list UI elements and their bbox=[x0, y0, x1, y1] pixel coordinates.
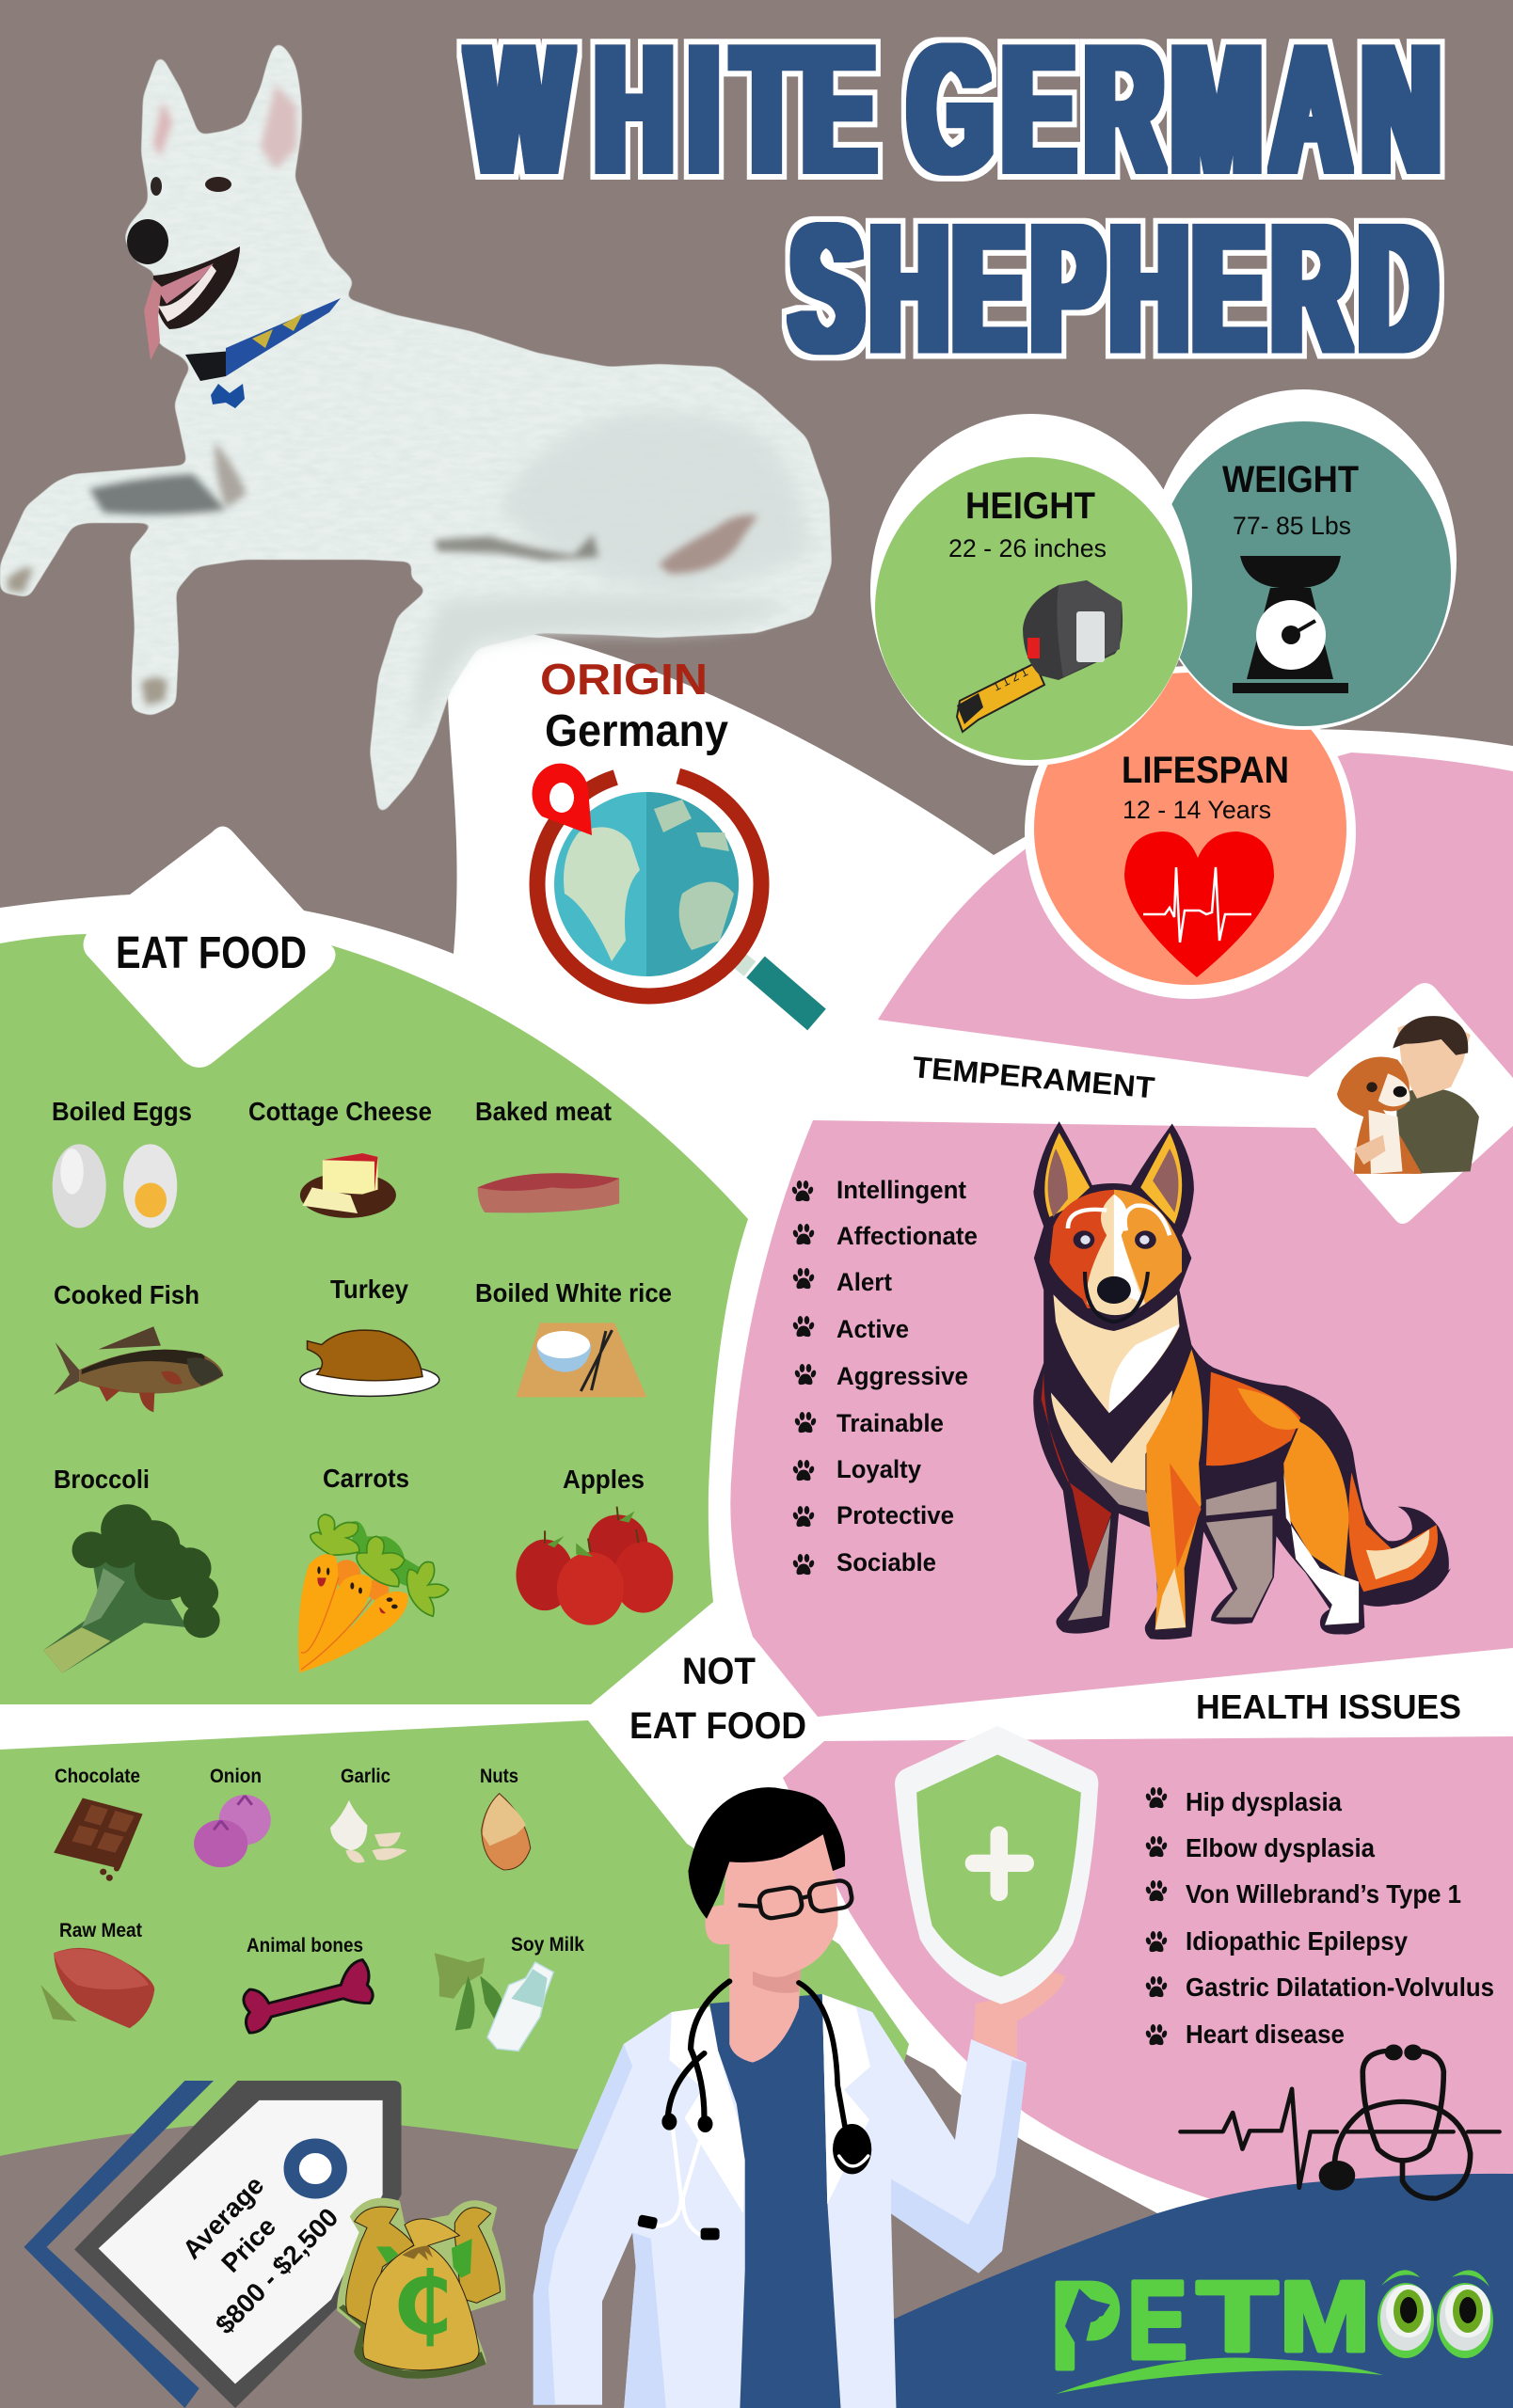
belly bbox=[659, 515, 757, 574]
not eat food heading: EAT FOOD bbox=[629, 1705, 806, 1747]
icon: fish bbox=[54, 1326, 223, 1412]
icon: chocolate bbox=[54, 1798, 143, 1881]
white stethoscope tubing bbox=[656, 2129, 701, 2236]
coat shade bbox=[534, 2044, 666, 2408]
bullet: Heart disease: Heart disease bbox=[1186, 2020, 1345, 2049]
arm bbox=[973, 1972, 1065, 2058]
not eat food icons bbox=[40, 1794, 553, 2051]
icon: baked meat bbox=[478, 1173, 619, 1212]
tag outline bbox=[74, 2081, 402, 2408]
stat: lifespan bbox=[1025, 666, 1356, 999]
logo: petmoo bbox=[1050, 2257, 1493, 2395]
stat: weight bbox=[1150, 389, 1457, 730]
front leg bbox=[1146, 1349, 1202, 1630]
not eat food labels: Garlic bbox=[341, 1766, 390, 1787]
icon: nut bbox=[482, 1794, 531, 1870]
icon: turkey bbox=[300, 1330, 439, 1396]
not eat food labels bbox=[55, 1766, 584, 1956]
bullet: Affectionate: Affectionate bbox=[836, 1222, 978, 1250]
bullet: Active: Active bbox=[836, 1315, 909, 1343]
illustration: orange dog bbox=[1033, 1121, 1451, 1640]
price text bbox=[177, 2170, 343, 2339]
icon: eggs bbox=[53, 1144, 177, 1228]
not eat food labels: Raw Meat bbox=[59, 1920, 142, 1941]
origin bbox=[512, 655, 817, 1022]
panel: health issues backdrop bbox=[783, 1736, 1513, 2199]
icon: cheese bbox=[300, 1153, 396, 1218]
white german shepherd photo bbox=[3, 45, 829, 811]
height value: 22 - 26 inches bbox=[948, 534, 1107, 562]
price text: Price bbox=[215, 2211, 281, 2278]
price tag bbox=[24, 2081, 402, 2408]
face bbox=[1049, 1190, 1114, 1308]
hind legs bbox=[1283, 1472, 1359, 1625]
icon: onion bbox=[194, 1795, 271, 1867]
icon: carrots bbox=[298, 1514, 449, 1672]
tail shading bbox=[414, 594, 790, 743]
under hip shadow bbox=[435, 534, 598, 561]
weight value: 77- 85 Lbs bbox=[1233, 512, 1351, 540]
health issues list bbox=[1145, 1787, 1494, 2049]
ears bbox=[1044, 1133, 1182, 1224]
neck bbox=[729, 1940, 802, 2063]
bullet: Loyalty bbox=[792, 1455, 921, 1483]
panel: eat food backdrop bbox=[0, 934, 748, 1704]
logo wordmark: E bbox=[1127, 2258, 1187, 2383]
panel: not eat food backdrop bbox=[0, 1720, 909, 2156]
cottage cheese label: Cottage Cheese bbox=[248, 1097, 432, 1126]
tag back chevron bbox=[24, 2081, 214, 2408]
not eat food labels: Onion bbox=[210, 1766, 262, 1787]
blue corner wave bbox=[847, 2174, 1513, 2408]
rice label: Boiled White rice bbox=[475, 1278, 672, 1307]
icon: scale bbox=[1233, 556, 1348, 693]
bullet: Loyalty: Loyalty bbox=[836, 1455, 921, 1483]
logo swoosh bbox=[1056, 2357, 1383, 2394]
shirt bbox=[709, 1994, 841, 2408]
chest bbox=[1053, 1294, 1179, 1413]
eat food heading: EAT FOOD bbox=[116, 928, 307, 978]
price text: $800 - $2,500 bbox=[210, 2202, 343, 2339]
illustration: doctor bbox=[534, 1787, 1065, 2408]
not eat food labels: Soy Milk bbox=[511, 1934, 584, 1956]
logo dog silhouette bbox=[1065, 2289, 1110, 2342]
doctor head and stethoscope bbox=[662, 1787, 1065, 2174]
bullet: Von Willebrand's: Von Willebrand’s Type 1 bbox=[1186, 1879, 1461, 1909]
bullet: Sociable bbox=[792, 1548, 936, 1576]
bullet: Elbow dysplasia: Elbow dysplasia bbox=[1186, 1833, 1376, 1862]
cooked fish label: Cooked Fish bbox=[54, 1280, 199, 1309]
title: WHITE GERMAN bbox=[469, 10, 1440, 210]
bullet: Trainable: Trainable bbox=[836, 1409, 944, 1437]
logo wordmark: P bbox=[1050, 2257, 1122, 2395]
panel: pink lifespan backdrop bbox=[878, 752, 1513, 1078]
icon: tape measure: 1 1 2 1 bbox=[991, 664, 1030, 694]
right lapel bbox=[822, 1994, 870, 2204]
icon: apples bbox=[516, 1507, 673, 1625]
height label: HEIGHT bbox=[965, 485, 1095, 527]
icon: shield bbox=[895, 1726, 1098, 2004]
carrots label: Carrots bbox=[323, 1464, 409, 1493]
temperament list bbox=[791, 1176, 978, 1576]
icon: money bags bbox=[337, 2198, 505, 2379]
bullet: Aggressive: Aggressive bbox=[836, 1362, 968, 1390]
lifespan label: LIFESPAN bbox=[1122, 750, 1289, 791]
not eat food labels: Animal bones bbox=[247, 1935, 363, 1956]
bullet: Hip dysplasia: Hip dysplasia bbox=[1186, 1787, 1343, 1816]
hip shading bbox=[499, 412, 809, 593]
bullet: Intellingent: Intellingent bbox=[836, 1176, 966, 1204]
torso bbox=[1206, 1372, 1300, 1465]
apples label: Apples bbox=[563, 1465, 645, 1494]
tag body bbox=[99, 2100, 383, 2384]
not eat food labels: Nuts bbox=[480, 1766, 518, 1787]
boiled eggs label: Boiled Eggs bbox=[52, 1097, 192, 1126]
shaded upper foreleg bbox=[89, 474, 226, 515]
doctor coat and shirt bbox=[534, 1994, 1027, 2408]
health issues heading: HEALTH ISSUES bbox=[1196, 1687, 1461, 1726]
logo wordmark: T bbox=[1197, 2261, 1278, 2372]
bullet: Idiopathic Epilepsy: Idiopathic Epilepsy bbox=[1186, 1926, 1409, 1956]
head bbox=[705, 1819, 838, 1976]
right sleeve shade bbox=[891, 2060, 1027, 2273]
left lapel bbox=[669, 2006, 745, 2213]
food icons bbox=[43, 1144, 673, 1673]
coat right bbox=[822, 1994, 1027, 2408]
coat buttons bbox=[637, 2214, 658, 2229]
icon: stethoscope with ekg bbox=[1180, 2047, 1500, 2198]
icon: raw meat bbox=[40, 1948, 154, 2028]
bullet: Alert: Alert bbox=[836, 1268, 892, 1296]
white layout band bbox=[0, 632, 1513, 2213]
temperament heading: TEMPERAMENT bbox=[911, 1050, 1156, 1105]
eyes and nose bbox=[205, 177, 231, 192]
tag hole bbox=[292, 2146, 340, 2192]
hair bbox=[688, 1787, 845, 1919]
weight label: WEIGHT bbox=[1222, 459, 1359, 500]
origin country: Germany bbox=[545, 706, 728, 756]
logo eyes bbox=[1378, 2270, 1493, 2358]
stat: height bbox=[870, 414, 1192, 766]
bullet: Sociable: Sociable bbox=[836, 1548, 936, 1576]
bullet: Gastric Dilatation-Volvulus: Gastric Dilatation-Volvulus bbox=[1186, 1972, 1494, 2002]
price text: Average bbox=[177, 2170, 269, 2265]
panel: temperament backdrop bbox=[730, 1120, 1513, 1717]
not eat food heading: NOT bbox=[682, 1651, 756, 1692]
currency mark: ₵ bbox=[392, 2254, 453, 2354]
title: SHEPHERD bbox=[791, 189, 1437, 388]
bullet: Active bbox=[792, 1315, 909, 1343]
icon: heart bbox=[1124, 832, 1274, 977]
tail bbox=[1348, 1472, 1438, 1592]
origin heading: ORIGIN bbox=[540, 655, 708, 704]
sticker: person hugging dog bbox=[1337, 1016, 1479, 1174]
logo wordmark: M bbox=[1280, 2261, 1370, 2372]
chest shadow bbox=[215, 442, 247, 508]
icon: rice on mat bbox=[516, 1323, 646, 1397]
baked meat label: Baked meat bbox=[475, 1097, 612, 1126]
ears bbox=[261, 85, 296, 169]
bullet: Protective: Protective bbox=[836, 1501, 954, 1529]
icon: tape measure bbox=[957, 580, 1123, 732]
icon: bone bbox=[244, 1960, 373, 2033]
icon: broccoli bbox=[43, 1504, 220, 1673]
glasses bbox=[739, 1879, 853, 1920]
not eat food heading bbox=[629, 1651, 806, 1747]
icon: globe with magnifier bbox=[512, 747, 817, 1022]
icon: soy milk bbox=[435, 1953, 553, 2051]
not eat food labels: Chocolate bbox=[55, 1766, 140, 1787]
left leg bbox=[1042, 1372, 1111, 1573]
mouth and tongue bbox=[153, 246, 240, 329]
icon: garlic bbox=[330, 1800, 407, 1862]
bullet: Trainable bbox=[794, 1409, 944, 1437]
coat left bbox=[534, 2012, 750, 2408]
turkey label: Turkey bbox=[330, 1275, 408, 1304]
bullet: Alert bbox=[792, 1268, 892, 1296]
broccoli label: Broccoli bbox=[54, 1465, 150, 1494]
collar and tag bbox=[185, 351, 232, 381]
title bbox=[469, 10, 1440, 388]
stethoscope on doctor bbox=[662, 1981, 871, 2174]
paws bbox=[8, 568, 167, 705]
lifespan value: 12 - 14 Years bbox=[1123, 796, 1271, 824]
food labels bbox=[52, 1097, 672, 1494]
